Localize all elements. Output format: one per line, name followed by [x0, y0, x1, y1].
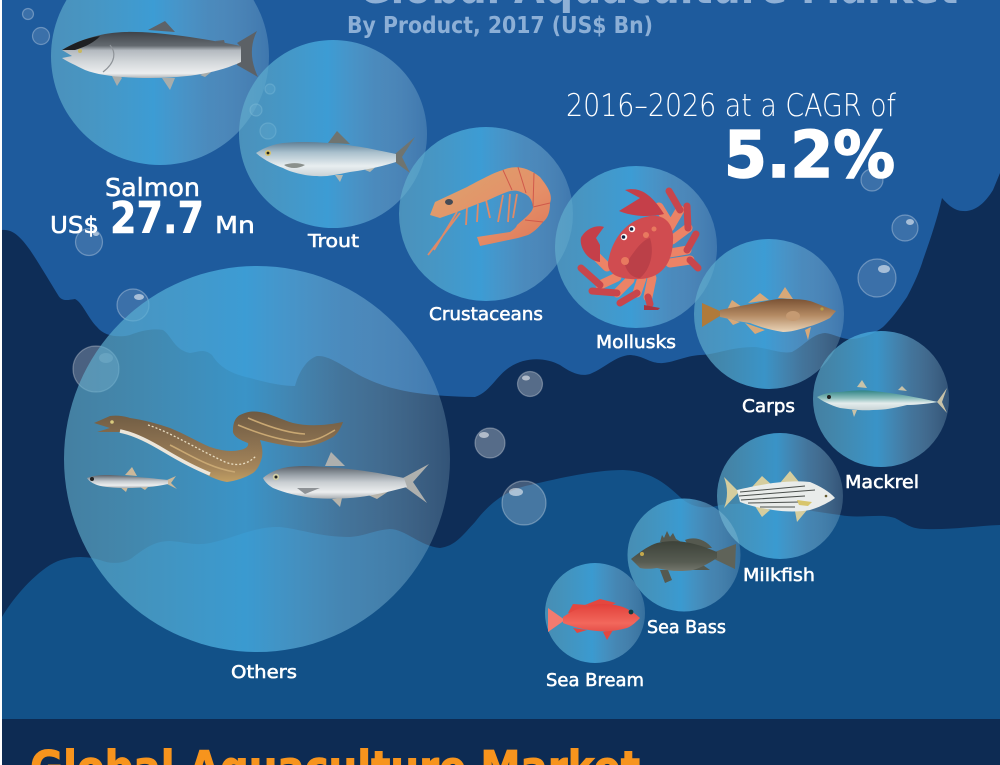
- icon: eel: [94, 411, 343, 482]
- label: Trout: Trout: [307, 231, 359, 252]
- bubble: [694, 239, 844, 389]
- panel: mollusks bubble: [555, 166, 717, 353]
- value: US$ 27.7 Mn: US$: [50, 213, 99, 239]
- bubble: [813, 331, 949, 467]
- icon: herring: [263, 452, 429, 507]
- CAGR caption: 2016–2026 at a CAGR of: [566, 88, 896, 124]
- icon: striped milkfish: [724, 471, 835, 522]
- bubble: [545, 563, 645, 663]
- panel: milkfish bubble: [717, 433, 843, 586]
- panel: others bubble: [64, 266, 450, 683]
- background: deep water wave: [2, 173, 1000, 719]
- label: Crustaceans: Crustaceans: [429, 304, 543, 325]
- icon: trout: [256, 131, 415, 182]
- label: Carps: Carps: [742, 396, 795, 417]
- bubble: [555, 166, 717, 328]
- icon: small anchovy: [87, 467, 177, 492]
- bubble: [717, 433, 843, 559]
- panel: salmon bubble: [50, 0, 269, 244]
- CAGR value: 5.2%: [724, 119, 895, 193]
- icon: sea bream: [548, 599, 640, 640]
- panel: sea bass bubble: [628, 498, 740, 638]
- label: Others: Others: [231, 662, 297, 683]
- subtitle: By Product, 2017 (US$ Bn): [347, 13, 653, 39]
- label: Mackrel: Mackrel: [845, 472, 919, 493]
- panel: sea bream bubble: [545, 563, 645, 691]
- bubble: [239, 40, 427, 228]
- icon: shrimp: [428, 167, 551, 255]
- air bubbles: [22, 8, 918, 525]
- label: Salmon: Salmon: [105, 173, 200, 202]
- icon: crab: [581, 189, 698, 310]
- panel: crustaceans bubble: [399, 127, 573, 325]
- panel: trout bubble: [239, 40, 427, 252]
- bubble: [399, 127, 573, 301]
- bubble: [64, 266, 450, 652]
- icon: sea bass: [631, 531, 736, 583]
- icon: salmon: [62, 21, 258, 90]
- panel: carps bubble: [694, 239, 844, 417]
- icon: mackerel: [817, 380, 947, 417]
- bubble: [51, 0, 269, 165]
- panel: mackerel bubble: [813, 331, 949, 493]
- icon: carp fish: [702, 287, 836, 340]
- value: US$ 27.7 Mn: Mn: [215, 213, 255, 239]
- label: Sea Bream: Sea Bream: [546, 670, 644, 691]
- label: Mollusks: Mollusks: [596, 332, 676, 353]
- footer band: [2, 719, 1000, 765]
- value: US$ 27.7 Mn: [50, 193, 255, 244]
- background: lower water wave: [2, 470, 1000, 719]
- value: US$ 27.7 Mn: 27.7: [110, 193, 204, 244]
- label: Sea Bass: Sea Bass: [647, 617, 726, 638]
- label: Milkfish: Milkfish: [743, 565, 815, 586]
- bubble: [628, 498, 740, 612]
